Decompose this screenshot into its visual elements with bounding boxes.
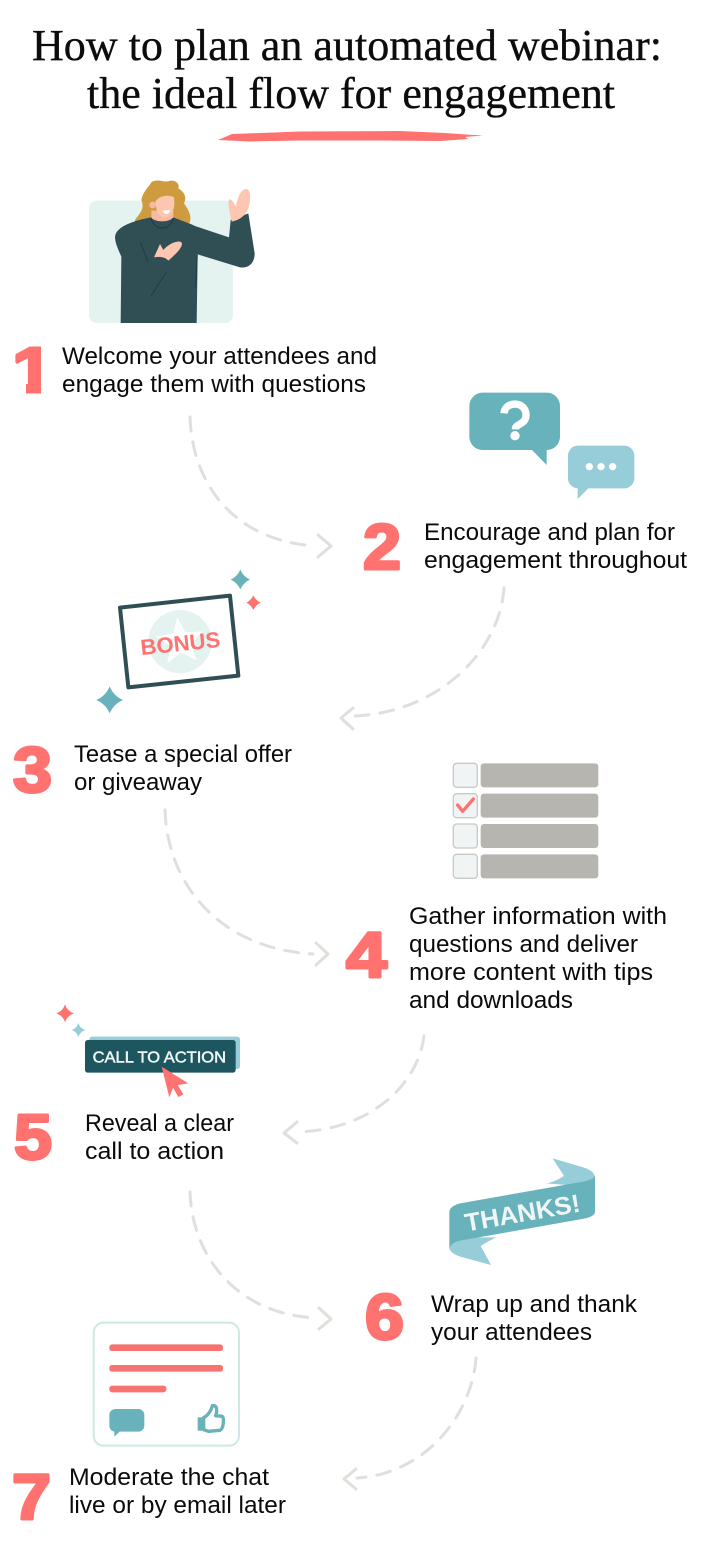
step 6 text	[431, 1291, 638, 1346]
step 7 text: Moderate the chat	[69, 1464, 269, 1491]
title: the ideal flow for engagement	[87, 69, 615, 118]
step 4 text: more content with tips	[409, 959, 653, 986]
step 2 text: engagement throughout	[424, 547, 687, 574]
step 7 text	[69, 1464, 286, 1519]
step number 7: 7	[12, 1461, 51, 1533]
arrow: step 4 to step 5	[284, 1036, 424, 1143]
step 4 text: and downloads	[409, 987, 573, 1014]
step number 6: 6	[365, 1281, 404, 1353]
arrow: step 1 to step 2	[190, 417, 331, 557]
arrow: step 6 to step 7	[344, 1358, 476, 1489]
step 4 text: questions and deliver	[409, 931, 638, 958]
step number 4: 4	[346, 919, 387, 991]
step 6 text: your attendees	[431, 1319, 592, 1346]
step number 5: 5	[14, 1101, 52, 1173]
step 2 text: Encourage and plan for	[424, 519, 675, 546]
step 5 text: call to action	[85, 1138, 224, 1165]
step 4 text: Gather information with	[409, 903, 667, 930]
panel: step 5	[14, 1004, 240, 1173]
step 5 text: Reveal a clear	[85, 1110, 234, 1137]
step number 1: 1	[12, 334, 54, 406]
title	[32, 21, 662, 118]
title underline brush stroke	[218, 131, 483, 142]
panel: step 7	[12, 1323, 286, 1533]
panel: step 4	[346, 763, 667, 1014]
icon: thanks ribbon	[449, 1158, 595, 1265]
step 1 text: engage them with questions	[62, 371, 366, 398]
title: How to plan an automated webinar:	[32, 21, 662, 70]
step 4 text	[409, 903, 667, 1014]
icon: bonus video frame with sparkles	[96, 570, 261, 713]
step 2 text	[424, 519, 687, 574]
step 3 text	[74, 741, 292, 796]
step number 2: 2	[363, 511, 401, 583]
step 7 text: live or by email later	[69, 1492, 286, 1519]
step 3 text: or giveaway	[74, 769, 202, 796]
icon: chat card	[94, 1323, 239, 1446]
step 6 text: Wrap up and thank	[431, 1291, 638, 1318]
icon: bonus video frame with sparkles: BONUS	[139, 627, 221, 660]
step 1 text	[62, 343, 377, 398]
panel: step 6	[365, 1158, 638, 1353]
icon: presenter waving	[89, 180, 255, 323]
panel: step 1	[12, 180, 377, 406]
step 5 text	[85, 1110, 234, 1165]
step 1 text: Welcome your attendees and	[62, 343, 377, 370]
icon: call to action button with cursor	[56, 1004, 240, 1097]
step number 3: 3	[13, 734, 52, 806]
panel: step 3	[13, 570, 292, 806]
icon: call to action button with cursor: CALL TO ACTION	[93, 1050, 226, 1067]
arrow: step 3 to step 4	[165, 810, 328, 965]
arrow: step 5 to step 6	[190, 1192, 331, 1329]
panel: step 2	[363, 393, 687, 583]
icon: checklist	[453, 763, 598, 878]
icon: speech bubbles	[469, 393, 634, 499]
arrow: step 2 to step 3	[341, 588, 504, 729]
icon: thanks ribbon: THANKS!	[463, 1190, 582, 1238]
step 3 text: Tease a special offer	[74, 741, 292, 768]
